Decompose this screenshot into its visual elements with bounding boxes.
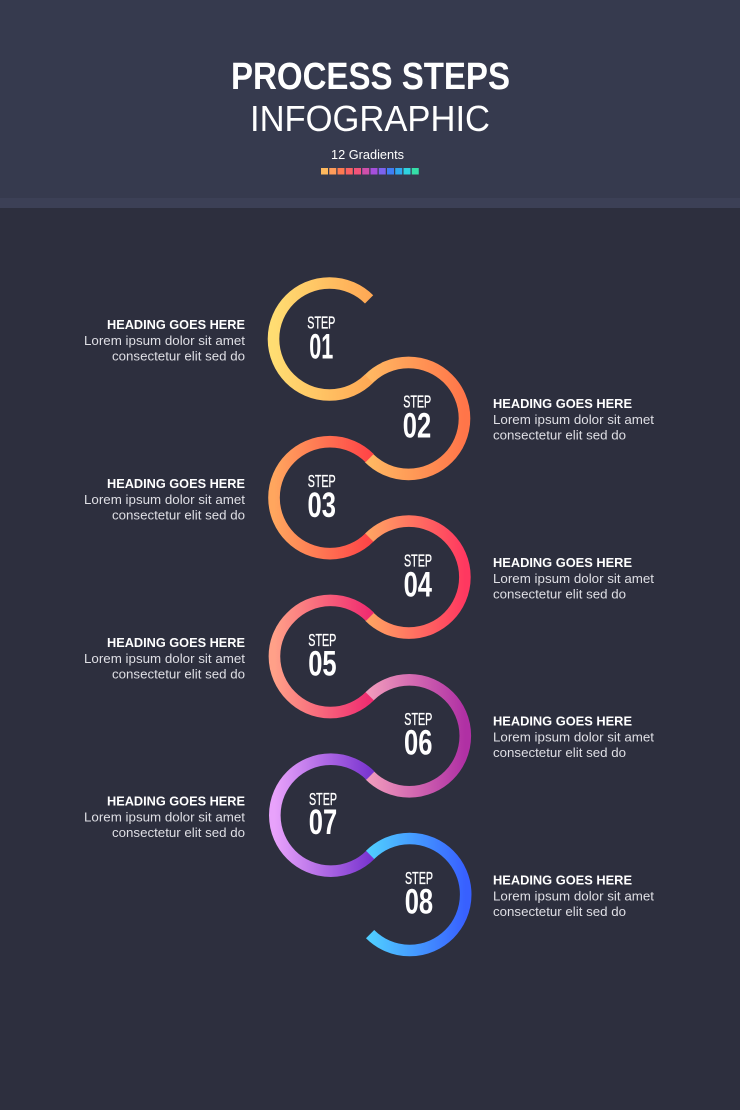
text block: step 1: HEADING GOES HERE: [107, 318, 245, 332]
text block: step 5: consectetur elit sed do: [112, 666, 245, 682]
text block: step 4: [493, 556, 654, 602]
text block: step 8: consectetur elit sed do: [493, 904, 626, 919]
text block: step 3: consectetur elit sed do: [112, 508, 245, 522]
text block: step 8: [493, 874, 654, 919]
step label 05: [308, 630, 337, 684]
step label 04: [404, 551, 432, 604]
text block: step 6: Lorem ipsum dolor sit amet: [493, 730, 654, 744]
step label 02: 02: [403, 407, 431, 446]
text block: step 8: Lorem ipsum dolor sit amet: [493, 888, 654, 904]
header band: [0, 0, 740, 208]
title: [231, 56, 510, 139]
step label 04: 04: [404, 565, 432, 604]
text block: step 7: Lorem ipsum dolor sit amet: [84, 810, 245, 824]
step label 08: 08: [405, 882, 433, 921]
step label 05: STEP: [308, 630, 336, 650]
arc: step 5: [274, 600, 370, 713]
step label 06: STEP: [404, 709, 432, 729]
text block: step 2: [493, 397, 654, 442]
text block: step 7: [84, 794, 245, 840]
text block: step 8: HEADING GOES HERE: [493, 874, 632, 888]
step label 03: STEP: [308, 471, 336, 491]
step label 01: 01: [309, 327, 333, 366]
step label 07: STEP: [309, 789, 337, 809]
arc: step 6: [370, 680, 465, 792]
arc: step 2: [369, 362, 464, 474]
title: PROCESS STEPS: [231, 56, 510, 98]
arc: step 8: [370, 839, 466, 951]
text block: step 3: HEADING GOES HERE: [107, 477, 245, 491]
title: INFOGRAPHIC: [250, 98, 490, 139]
step label 08: STEP: [405, 868, 433, 888]
text block: step 2: Lorem ipsum dolor sit amet: [493, 412, 654, 427]
text block: step 7: consectetur elit sed do: [112, 825, 245, 840]
subtitle: 12 Gradients: [331, 147, 404, 162]
arc: step 1: [274, 283, 369, 395]
text block: step 4: Lorem ipsum dolor sit amet: [493, 571, 654, 586]
text block: step 2: HEADING GOES HERE: [493, 397, 632, 411]
text block: step 4: consectetur elit sed do: [493, 586, 626, 602]
text block: step 5: Lorem ipsum dolor sit amet: [84, 651, 245, 666]
text block: step 5: [84, 636, 245, 682]
text block: step 6: [493, 714, 654, 760]
step label 01: [307, 312, 335, 366]
step label 01: STEP: [307, 312, 335, 332]
text block: step 1: Lorem ipsum dolor sit amet: [84, 333, 245, 348]
arc: step 7: [275, 759, 370, 871]
text block: step 5: HEADING GOES HERE: [107, 636, 245, 650]
step label 03: [308, 471, 336, 525]
step label 08: [405, 868, 433, 921]
text block: step 6: consectetur elit sed do: [493, 745, 626, 760]
text block: step 1: [84, 318, 245, 364]
gradient swatches: [321, 168, 419, 174]
step label 07: [309, 789, 337, 842]
step label 02: [403, 392, 431, 446]
step label 02: STEP: [403, 392, 431, 412]
step label 04: STEP: [404, 551, 432, 571]
step label 06: [404, 709, 432, 763]
text block: step 2: consectetur elit sed do: [493, 428, 626, 442]
arc: step 4: [369, 521, 465, 633]
step label 03: 03: [308, 486, 336, 525]
text block: step 3: Lorem ipsum dolor sit amet: [84, 492, 245, 507]
arc: step 3: [274, 442, 370, 554]
step label 06: 06: [404, 724, 432, 763]
step label 05: 05: [308, 644, 337, 684]
text block: step 6: HEADING GOES HERE: [493, 714, 632, 728]
step label 07: 07: [309, 803, 337, 842]
text block: step 1: consectetur elit sed do: [112, 348, 245, 364]
text block: step 3: [84, 477, 245, 522]
text block: step 7: HEADING GOES HERE: [107, 794, 245, 808]
text block: step 4: HEADING GOES HERE: [493, 556, 632, 570]
